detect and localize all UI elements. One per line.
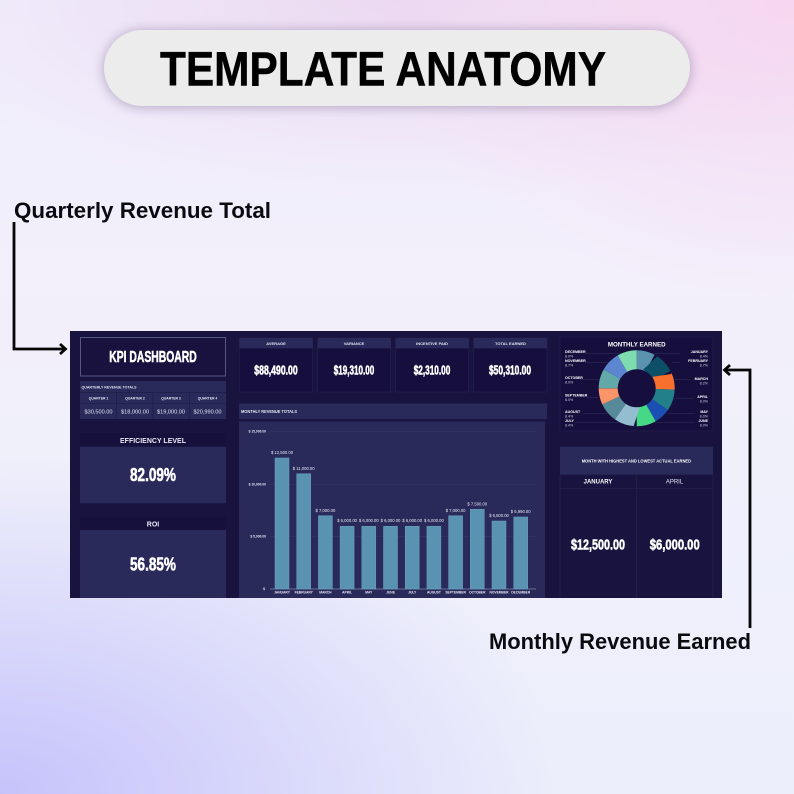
bar month labels: SEPTEMBER bbox=[445, 590, 466, 594]
panel: KPI dashboard title bbox=[80, 338, 226, 376]
bar value labels: $ 12,500.00 bbox=[271, 450, 294, 455]
bar value labels: $ 6,000.00 bbox=[337, 518, 358, 523]
donut labels right: 8.0% bbox=[700, 414, 709, 418]
donut labels left: 8.0% bbox=[565, 380, 574, 384]
callout: monthly revenue earned: Monthly Revenue Earned bbox=[489, 629, 751, 654]
bar month labels: APRIL bbox=[342, 590, 352, 594]
title pill: TEMPLATE ANATOMY bbox=[160, 44, 606, 97]
chart axis labels: $ 5,000.00 bbox=[250, 534, 266, 538]
panel: quarterly revenue totals: QUARTERLY REVENUE TOTALS bbox=[82, 384, 137, 390]
bar value labels: $ 6,500.00 bbox=[489, 513, 510, 518]
bar month labels: JANUARY bbox=[274, 590, 291, 594]
dashboard bbox=[70, 331, 722, 598]
donut labels right: 8.0% bbox=[700, 424, 709, 428]
bar value labels bbox=[271, 450, 531, 523]
card: total earned bbox=[474, 338, 547, 392]
donut labels right: 8.4% bbox=[700, 354, 709, 358]
card: variance bbox=[318, 338, 391, 392]
panel: quarterly revenue totals bbox=[80, 381, 226, 419]
panel: quarterly revenue totals: QUARTER 1 bbox=[89, 397, 108, 401]
panel: monthly earned donut: MONTHLY EARNED bbox=[608, 342, 666, 348]
panel: highest and lowest month: $12,500.00 bbox=[571, 536, 625, 553]
card: incentive paid bbox=[396, 338, 469, 392]
donut leader lines bbox=[575, 354, 695, 422]
chart axis labels: $ 15,000.00 bbox=[249, 430, 266, 434]
bar month labels: JUNE bbox=[386, 590, 396, 594]
bar value labels: $ 6,990.00 bbox=[511, 509, 531, 514]
donut labels left bbox=[565, 350, 588, 428]
panel: ROI: 56.85% bbox=[130, 555, 176, 575]
bar value labels: $ 6,000.00 bbox=[359, 518, 379, 523]
panel: ROI: ROI bbox=[147, 522, 159, 528]
donut labels left: 8.0% bbox=[565, 398, 574, 402]
card: total earned: TOTAL EARNED bbox=[495, 341, 526, 346]
panel: highest and lowest month: APRIL bbox=[666, 479, 684, 485]
donut labels left: DECEMBER bbox=[565, 350, 586, 354]
donut labels right bbox=[688, 350, 709, 428]
bar value labels: $ 11,000.00 bbox=[293, 466, 315, 471]
donut labels left: AUGUST bbox=[565, 410, 581, 414]
bar month labels: JULY bbox=[408, 590, 417, 594]
panel: quarterly revenue totals: QUARTER 3 bbox=[161, 397, 181, 401]
bar value labels: $ 7,000.00 bbox=[316, 508, 336, 513]
panel: efficiency level: EFFICIENCY LEVEL bbox=[120, 438, 187, 445]
arrow: to KPI panel bbox=[14, 222, 66, 354]
panel: efficiency level: 82.09% bbox=[130, 465, 176, 485]
panel: monthly earned donut bbox=[560, 337, 713, 431]
card: average: AVERAGE bbox=[266, 341, 286, 346]
bar value labels: $ 6,000.00 bbox=[424, 518, 444, 523]
donut labels left: NOVEMBER bbox=[565, 359, 586, 363]
chart axis labels bbox=[249, 430, 266, 591]
donut labels right: 8.7% bbox=[700, 364, 709, 368]
chart axis labels: $ 10,000.00 bbox=[249, 482, 266, 486]
donut labels right: JUNE bbox=[698, 419, 709, 423]
card: average: $88,490.00 bbox=[254, 364, 298, 378]
bar month labels: MARCH bbox=[319, 590, 332, 594]
panel: monthly revenue totals header: MONTHLY REVENUE TOTALS bbox=[241, 409, 297, 414]
bar month labels: NOVEMBER bbox=[489, 590, 509, 594]
card: incentive paid: INCENTIVE PAID bbox=[416, 341, 448, 346]
chart axis labels: $ bbox=[263, 587, 265, 591]
panel: quarterly revenue totals: $30,500.00 bbox=[84, 410, 112, 416]
bar month labels: DECEMBER bbox=[511, 590, 531, 594]
donut labels right: MARCH bbox=[695, 377, 708, 381]
donut labels left: 8.4% bbox=[565, 414, 574, 418]
panel: quarterly revenue totals: $18,000.00 bbox=[121, 410, 149, 416]
card: average bbox=[240, 338, 313, 392]
donut labels left: 8.4% bbox=[565, 424, 574, 428]
bar month labels: FEBRUARY bbox=[295, 590, 314, 594]
panel: quarterly revenue totals: QUARTER 2 bbox=[125, 397, 145, 401]
donut labels left: 8.7% bbox=[565, 364, 574, 368]
bar month labels: OCTOBER bbox=[469, 590, 486, 594]
panel: monthly revenue totals header bbox=[239, 404, 547, 419]
card: variance: VARIANCE bbox=[344, 341, 365, 346]
donut labels right: JANUARY bbox=[691, 350, 709, 354]
panel: quarterly revenue totals: $20,990.00 bbox=[194, 410, 222, 416]
panel: efficiency level bbox=[80, 433, 226, 503]
title pill bbox=[104, 30, 690, 106]
panel: highest and lowest month: MONTH WITH HIGHEST AND LOWEST ACTUAL EARNED bbox=[582, 458, 692, 464]
card: total earned: $50,310.00 bbox=[489, 364, 531, 378]
bar value labels: $ 7,500.00 bbox=[467, 502, 488, 506]
bar month labels bbox=[274, 590, 531, 594]
panel: ROI bbox=[80, 517, 226, 598]
panel: highest and lowest month bbox=[560, 447, 713, 598]
donut labels left: 8.0% bbox=[565, 354, 574, 358]
bar value labels: $ 6,000.00 bbox=[381, 518, 401, 523]
bar value labels: $ 6,000.00 bbox=[402, 518, 423, 523]
panel: highest and lowest month: JANUARY bbox=[584, 479, 612, 485]
bar chart: monthly revenue bbox=[239, 422, 545, 598]
donut labels left: JULY bbox=[565, 419, 574, 423]
donut labels right: FEBRUARY bbox=[688, 359, 709, 363]
bar month labels: MAY bbox=[365, 590, 373, 594]
panel: quarterly revenue totals: QUARTER 4 bbox=[198, 397, 217, 401]
panel: highest and lowest month: $6,000.00 bbox=[650, 536, 700, 553]
donut chart bbox=[597, 349, 676, 428]
card: variance: $19,310.00 bbox=[334, 364, 374, 378]
chart bars bbox=[275, 458, 528, 589]
panel: quarterly revenue totals: $19,000.00 bbox=[157, 410, 185, 416]
bar value labels: $ 7,000.00 bbox=[446, 508, 466, 513]
card: incentive paid: $2,310.00 bbox=[414, 364, 450, 378]
arrow: to monthly earned donut bbox=[724, 365, 750, 628]
donut labels right: 8.0% bbox=[700, 400, 709, 404]
donut labels right: 8.2% bbox=[700, 381, 709, 385]
donut labels right: APRIL bbox=[697, 395, 709, 399]
callout: quarterly revenue total: Quarterly Revenue Total bbox=[14, 198, 271, 223]
panel: KPI dashboard title: KPI DASHBOARD bbox=[109, 349, 197, 366]
donut labels right: MAY bbox=[700, 410, 709, 414]
bar month labels: AUGUST bbox=[427, 590, 441, 594]
donut labels left: SEPTEMBER bbox=[565, 394, 588, 398]
donut labels left: OCTOBER bbox=[565, 376, 583, 380]
